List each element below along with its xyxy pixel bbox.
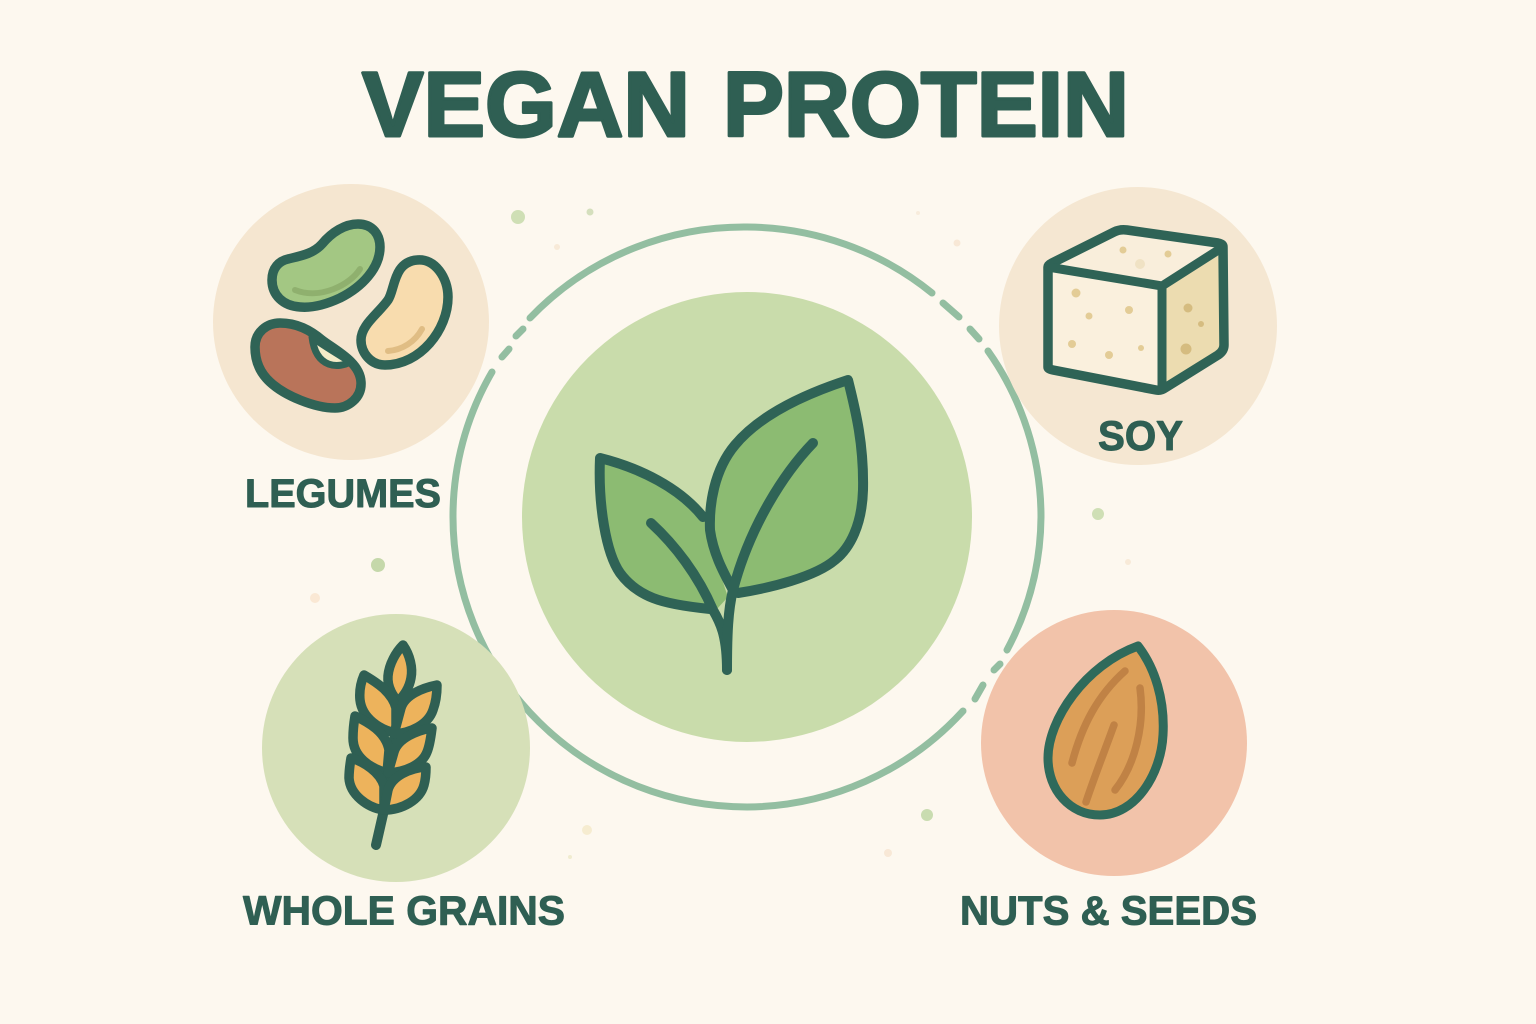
label: whole grains: WHOLE GRAINS xyxy=(243,888,565,934)
icon: leaf sprout xyxy=(600,380,863,670)
icon: tofu cube xyxy=(1048,230,1224,390)
title xyxy=(362,54,1129,156)
center disc xyxy=(522,292,972,742)
title: VEGAN xyxy=(362,54,690,156)
label: nuts and seeds: NUTS & SEEDS xyxy=(960,888,1257,934)
decorative scattered dots xyxy=(310,208,1131,859)
panel: nuts and seeds xyxy=(960,610,1257,934)
icon: almond xyxy=(1048,646,1163,815)
label: soy: SOY xyxy=(1098,412,1183,459)
grains background circle xyxy=(262,614,530,882)
panel: whole grains xyxy=(243,614,565,934)
icon: cream bean xyxy=(361,260,448,365)
nuts background circle xyxy=(981,610,1247,876)
soy background circle xyxy=(999,187,1277,465)
panel: legumes xyxy=(213,184,489,516)
title: PROTEIN xyxy=(723,54,1129,156)
icon: green bean xyxy=(272,224,380,307)
icon: wheat ear xyxy=(349,645,437,845)
panel: soy xyxy=(999,187,1277,465)
icon: brown bean xyxy=(255,323,361,408)
dashed orbit ring xyxy=(453,227,1041,807)
legumes background circle xyxy=(213,184,489,460)
label: legumes: LEGUMES xyxy=(245,472,441,516)
